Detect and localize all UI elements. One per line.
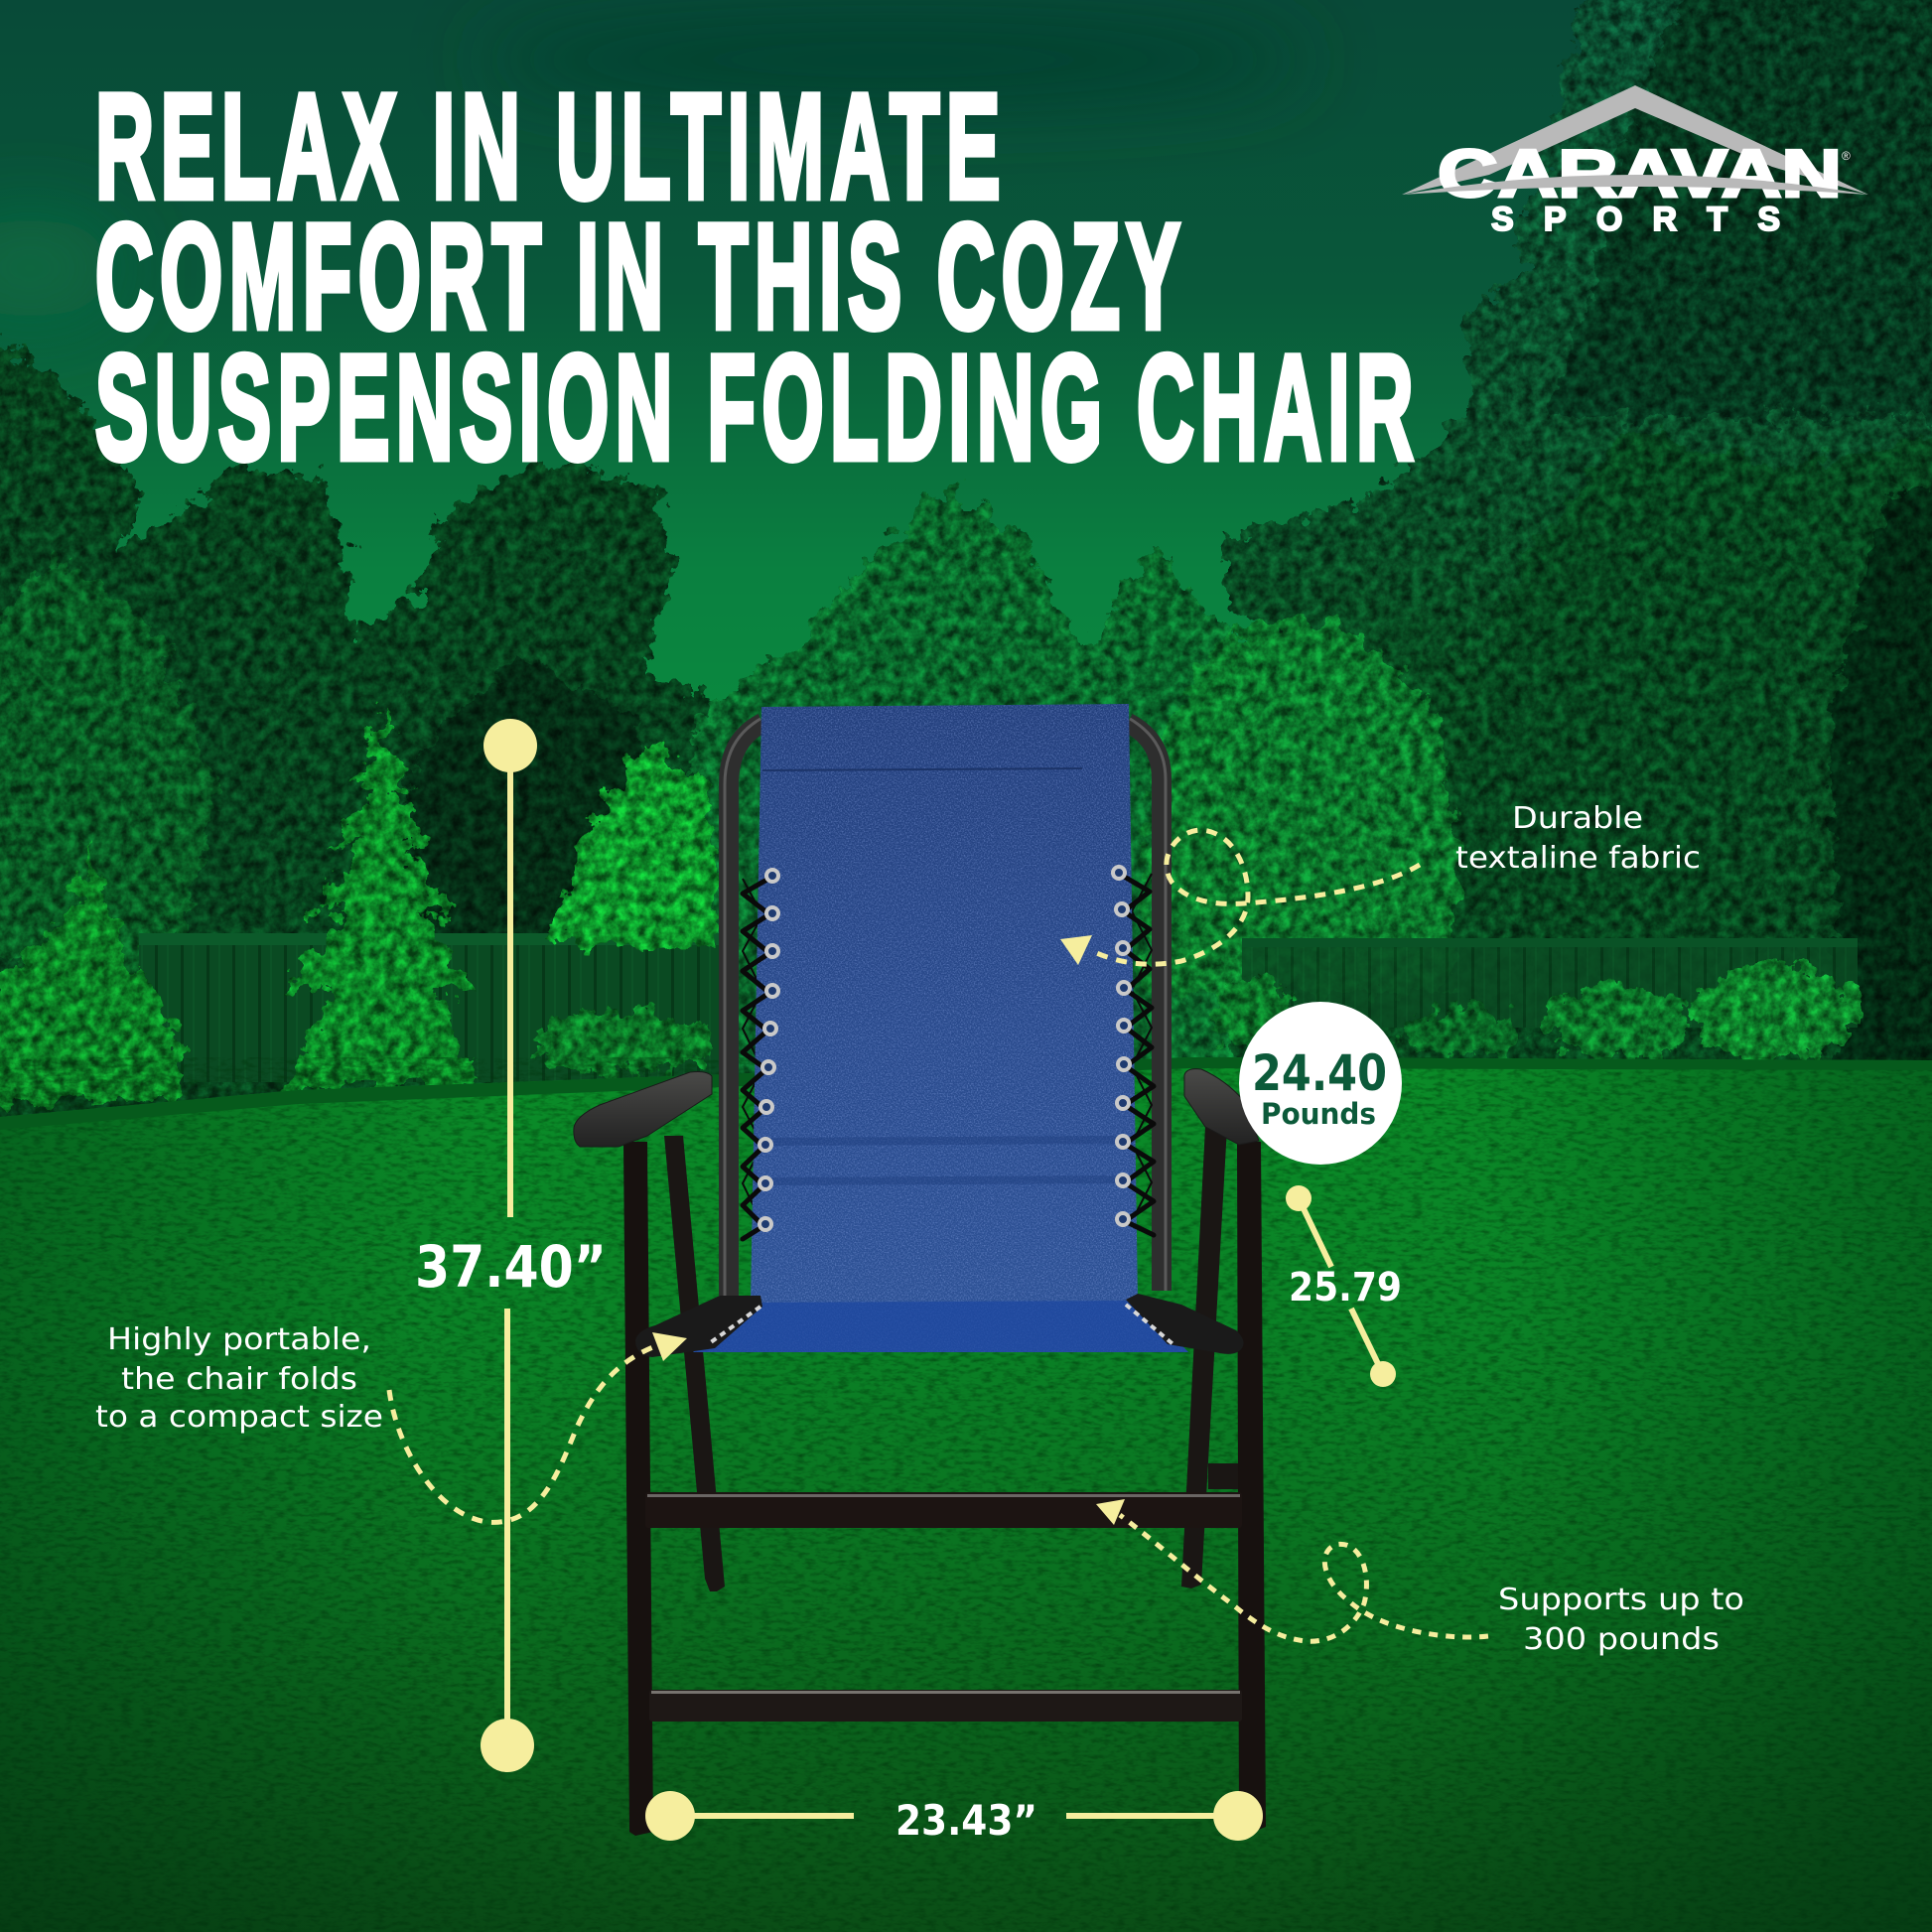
chair crossbars <box>645 1492 1242 1722</box>
chair front legs <box>623 1142 1266 1836</box>
callout: fabric <box>1060 801 1701 965</box>
logo registered mark: ® <box>1842 149 1851 163</box>
depth line <box>1286 1185 1396 1387</box>
height dimension: 37.40 <box>415 719 607 1772</box>
fabric arrow <box>1060 830 1420 965</box>
logo roof <box>1402 85 1868 195</box>
background trees <box>0 0 1932 1142</box>
capacity text: 300 pounds <box>1523 1622 1720 1657</box>
height line <box>481 719 537 1772</box>
fabric text <box>1455 801 1701 876</box>
callout: load capacity <box>1096 1499 1744 1657</box>
capacity arrow <box>1096 1499 1488 1641</box>
chair back laces <box>743 875 1154 1239</box>
width value: 23.43” <box>896 1796 1037 1845</box>
chair rear legs <box>664 1127 1239 1591</box>
callout: portability <box>95 1322 687 1522</box>
capacity text <box>1498 1583 1744 1657</box>
chair seat brackets <box>635 1294 1244 1357</box>
chair outer cords <box>743 874 1152 1224</box>
foreground shrubs <box>0 700 1858 1102</box>
chair fabric <box>693 704 1188 1352</box>
sky clouds <box>0 20 1311 318</box>
width line <box>645 1791 1263 1841</box>
portability text: the chair folds <box>121 1362 357 1397</box>
chair armrests <box>574 1069 1259 1147</box>
logo: Caravan Sports <box>1402 85 1868 238</box>
capacity text: Supports up to <box>1498 1583 1744 1617</box>
weight badge <box>1239 1002 1402 1165</box>
title <box>95 63 1420 490</box>
depth value: 25.79 <box>1289 1265 1402 1311</box>
logo sub-wordmark: SPORTS <box>1491 201 1780 238</box>
weight unit: Pounds <box>1261 1097 1376 1131</box>
logo swoosh <box>1402 175 1868 195</box>
portability arrow <box>389 1332 687 1522</box>
lawn <box>0 1057 1932 1932</box>
wooden fence <box>139 933 1858 1082</box>
title: RELAX IN ULTIMATE <box>95 63 1007 229</box>
weight value: 24.40 <box>1252 1044 1387 1102</box>
background sky <box>0 0 1932 1142</box>
fabric text: textaline fabric <box>1455 841 1701 876</box>
portability text: Highly portable, <box>107 1322 371 1357</box>
portability text <box>95 1322 383 1435</box>
fabric text: Durable <box>1512 801 1643 836</box>
portability text: to a compact size <box>95 1400 383 1435</box>
chair grommets <box>759 867 1130 1230</box>
depth dimension: 25.79 <box>1286 1185 1402 1387</box>
chair back frame <box>725 719 1166 1296</box>
width dimension: 23.43 <box>645 1791 1263 1845</box>
logo wordmark: CARAVAN <box>1438 136 1842 211</box>
height value: 37.40” <box>415 1233 607 1301</box>
chair <box>574 704 1266 1836</box>
